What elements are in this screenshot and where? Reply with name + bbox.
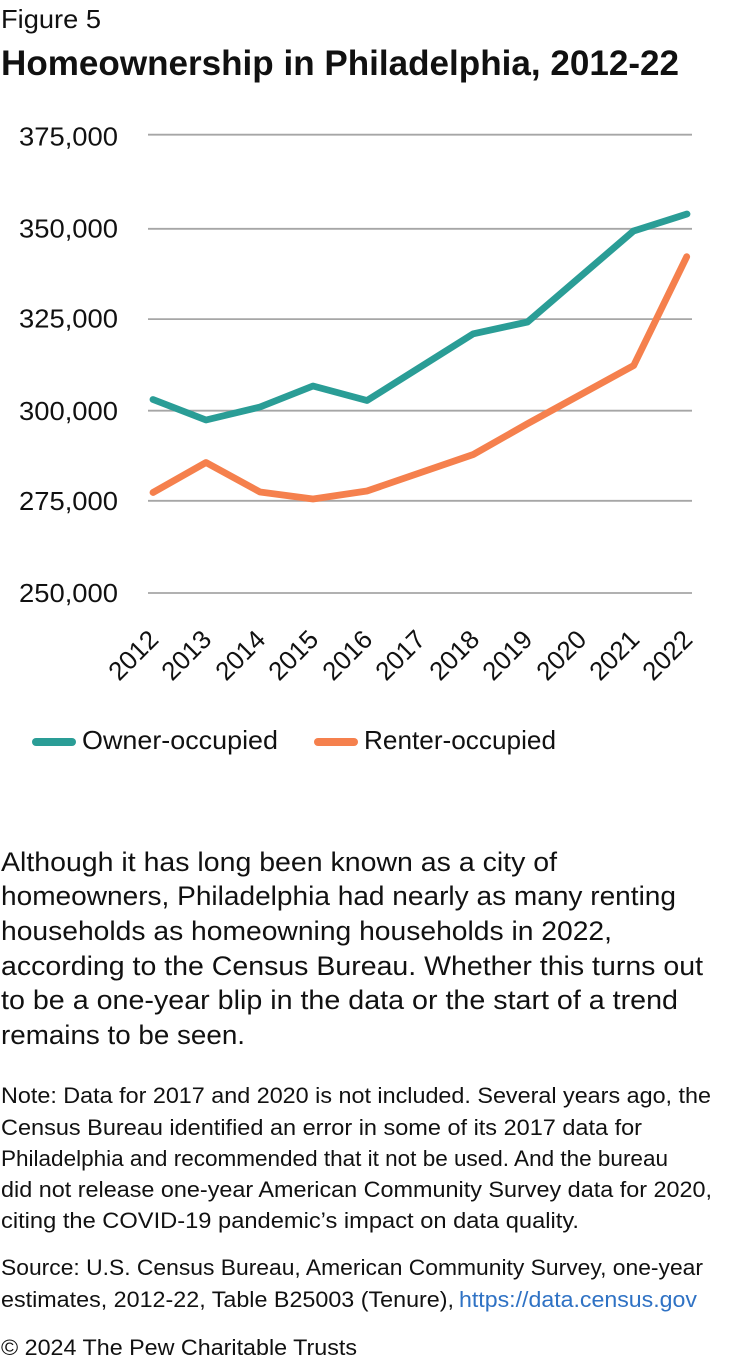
x axis labels: 2019 bbox=[476, 624, 538, 686]
y axis labels: 250,000 bbox=[19, 578, 118, 608]
body paragraph bbox=[1, 847, 704, 1050]
y axis labels: 350,000 bbox=[19, 214, 118, 244]
body paragraph: homeowners, Philadelphia had nearly as many renting bbox=[1, 881, 676, 911]
note: Census Bureau identified an error in some of its 2017 data for bbox=[1, 1115, 642, 1140]
x axis labels: 2020 bbox=[530, 624, 592, 686]
x axis labels: 2014 bbox=[209, 624, 271, 686]
x axis labels: 2015 bbox=[262, 624, 324, 686]
note: Note: Data for 2017 and 2020 is not included. Several years ago, the bbox=[1, 1083, 711, 1108]
renter-occupied line bbox=[153, 257, 687, 499]
x axis labels: 2016 bbox=[316, 624, 378, 686]
x axis labels: 2017 bbox=[369, 624, 431, 686]
note: citing the COVID-19 pandemic’s impact on data quality. bbox=[1, 1208, 579, 1233]
note bbox=[1, 1083, 712, 1233]
copyright: © 2024 The Pew Charitable Trusts bbox=[1, 1335, 357, 1360]
body paragraph: to be a one-year blip in the data or the start of a trend bbox=[1, 985, 678, 1015]
y axis labels: 325,000 bbox=[19, 304, 118, 334]
source bbox=[1, 1255, 703, 1312]
y axis labels bbox=[19, 122, 118, 608]
x axis labels bbox=[102, 624, 698, 686]
legend: Owner-occupied bbox=[82, 725, 278, 755]
x axis labels: 2018 bbox=[423, 624, 485, 686]
note: Philadelphia and recommended that it not be used. And the bureau bbox=[1, 1146, 668, 1171]
y axis labels: 375,000 bbox=[19, 122, 118, 152]
body paragraph: households as homeowning households in 2022, bbox=[1, 916, 612, 946]
x axis labels: 2021 bbox=[583, 624, 645, 686]
y axis labels: 275,000 bbox=[19, 486, 118, 516]
body paragraph: remains to be seen. bbox=[1, 1020, 245, 1050]
line chart bbox=[19, 122, 698, 686]
source: Source: U.S. Census Bureau, American Community Survey, one-year bbox=[1, 1255, 703, 1280]
owner-occupied line bbox=[153, 214, 687, 420]
source: estimates, 2012-22, Table B25003 (Tenure), bbox=[1, 1287, 454, 1312]
y axis labels: 300,000 bbox=[19, 396, 118, 426]
x axis labels: 2012 bbox=[102, 624, 164, 686]
title: Homeownership in Philadelphia, 2012-22 bbox=[1, 44, 679, 83]
body paragraph: Although it has long been known as a city of bbox=[1, 847, 558, 877]
legend bbox=[36, 725, 556, 755]
figure label: Figure 5 bbox=[1, 4, 101, 34]
x axis labels: 2013 bbox=[155, 624, 217, 686]
note: did not release one-year American Community Survey data for 2020, bbox=[1, 1177, 712, 1202]
source: https://data.census.gov bbox=[459, 1287, 697, 1312]
body paragraph: according to the Census Bureau. Whether this turns out bbox=[1, 951, 704, 981]
legend: Renter-occupied bbox=[364, 725, 556, 755]
x axis labels: 2022 bbox=[636, 624, 698, 686]
